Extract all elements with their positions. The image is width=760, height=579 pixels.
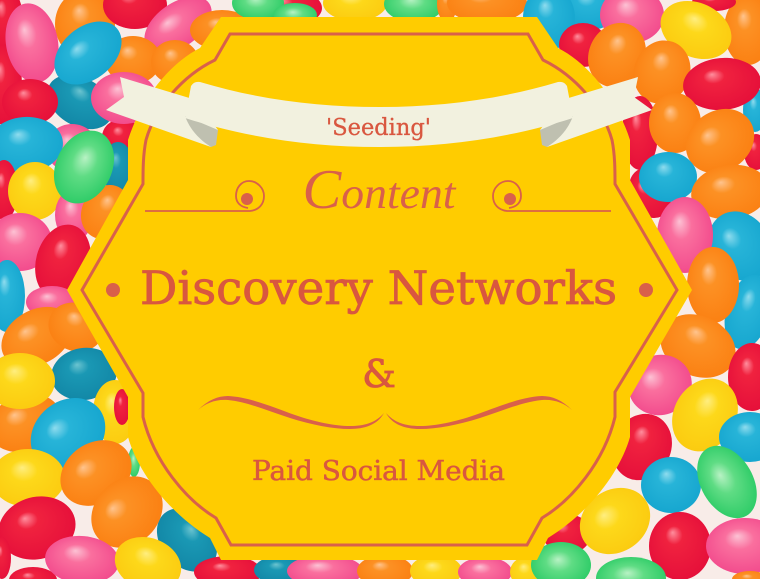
bullet: left <box>106 283 120 297</box>
flourish: right spiral rule <box>493 181 611 211</box>
text: Paid Social Media: Paid Social Media <box>252 456 505 487</box>
heading: Discovery Networks: Discovery Networks <box>140 261 617 315</box>
bullet: right <box>639 283 653 297</box>
banner text: 'Seeding' <box>326 115 431 141</box>
banner: left tail <box>106 77 218 147</box>
heading: Content: Content <box>302 159 457 221</box>
banner: centre band <box>185 82 573 147</box>
banner: left fold shadow <box>185 116 218 147</box>
banner: right tail <box>540 77 652 147</box>
banner: right fold shadow <box>540 116 573 147</box>
flourish: moustache divider <box>198 396 572 429</box>
badge: yellow octagonal plaque <box>67 17 692 560</box>
badge: inner red outline <box>82 34 677 545</box>
banner: ribbon with Seeding label <box>106 77 652 147</box>
ampersand: & <box>362 352 396 396</box>
flourish: left spiral rule <box>145 181 264 211</box>
